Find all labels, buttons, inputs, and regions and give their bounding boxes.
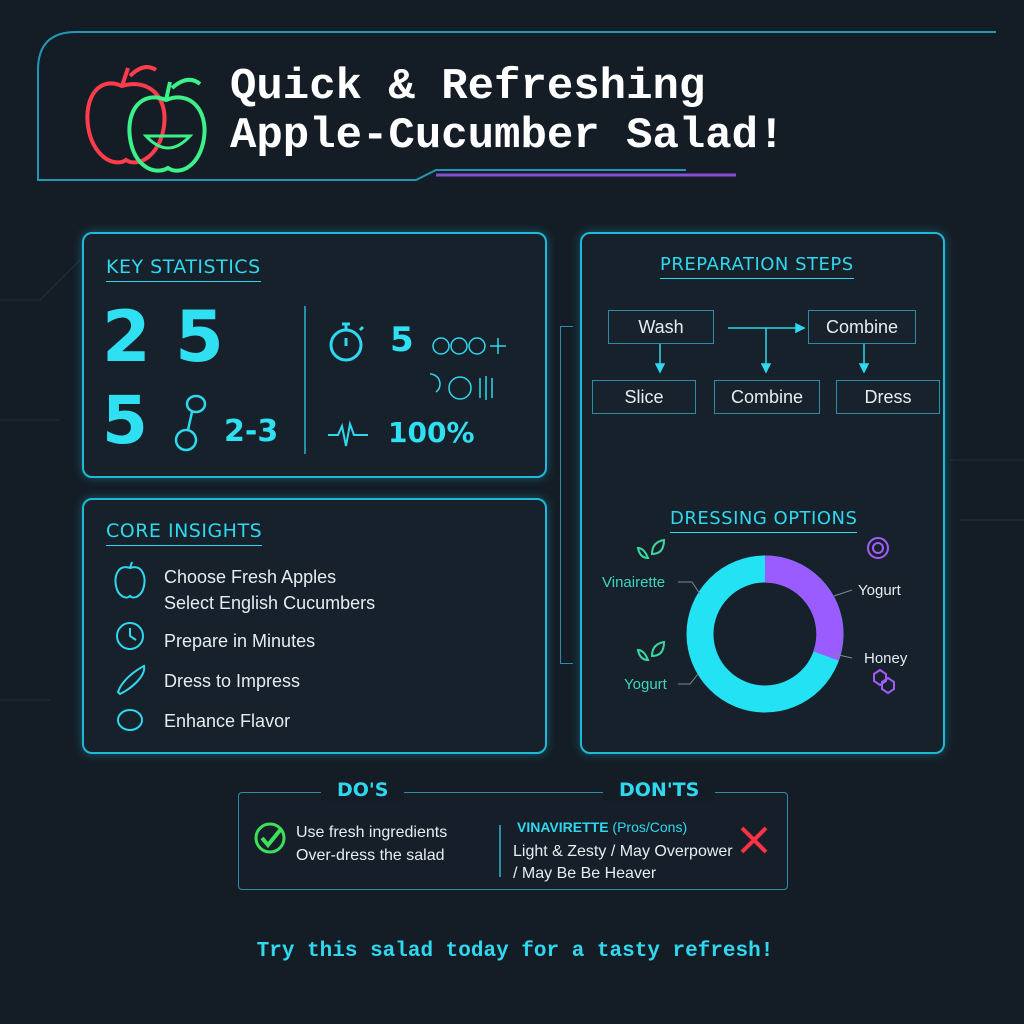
icon: stopwatch [330, 322, 364, 362]
insight texts: Select English Cucumbers [164, 593, 375, 613]
panel: preparation & dressing: Yogurt [624, 676, 667, 693]
footer call to action: Try this salad today for a tasty refresh! [257, 940, 773, 963]
connector bracket [560, 326, 573, 664]
panel: core insights [82, 498, 547, 754]
panel: do's and don'ts: / May Be Be Heaver [513, 865, 656, 882]
stat numbers: 2 5 [102, 296, 224, 378]
flowchart: Combine [826, 317, 898, 337]
flowchart: Combine [731, 387, 803, 407]
heading: don'ts: DON'TS [619, 779, 699, 801]
panel: key statistics: 2-3 [224, 414, 278, 449]
heading: CORE INSIGHTS [106, 520, 262, 542]
panel: core insights: Enhance Flavor [164, 711, 290, 731]
insight texts [164, 567, 375, 613]
icon: pulse [328, 420, 368, 446]
flowchart [592, 310, 940, 414]
title: Apple-Cucumber Salad! [230, 111, 784, 161]
panel: do's and don'ts: Light & Zesty / May Overpower [513, 843, 733, 860]
flowchart: Slice [624, 387, 664, 407]
heading: do's [321, 779, 404, 801]
panel: preparation & dressing [580, 232, 945, 754]
icon: honey dipper [174, 394, 206, 452]
panel: key statistics: 5 [102, 382, 148, 459]
panel: preparation & dressing: Yogurt [858, 582, 901, 599]
do's text: Over-dress the salad [296, 847, 445, 864]
icon: cross [740, 826, 768, 854]
icon: check [254, 822, 286, 854]
flowchart: Dress [864, 387, 912, 407]
icon: apples [85, 65, 207, 173]
flowchart: Wash [638, 317, 684, 337]
do's text [296, 824, 447, 864]
heading: do's: DO'S [337, 779, 388, 801]
title: Quick & Refreshing [230, 62, 705, 112]
panel: key statistics: 100% [388, 416, 475, 449]
header panel [37, 31, 996, 181]
panel: key statistics: 5 [390, 320, 414, 360]
icons [114, 562, 146, 731]
panel: key statistics [82, 232, 547, 478]
panel: do's and don'ts [238, 792, 788, 890]
title [230, 62, 784, 161]
heading: dressing options: DRESSING OPTIONS [670, 508, 857, 529]
panel: preparation & dressing: Honey [864, 650, 907, 667]
donut chart [636, 537, 895, 712]
heading: KEY STATISTICS [106, 256, 261, 278]
panel: core insights: Dress to Impress [164, 671, 300, 691]
don'ts text: VINAVIRETTE (Pros/Cons) [517, 819, 687, 835]
panel: core insights: Prepare in Minutes [164, 631, 315, 651]
do's text: Use fresh ingredients [296, 824, 447, 841]
heading: prep steps: PREPARATION STEPS [660, 254, 854, 275]
icons: small [430, 337, 506, 400]
donut labels: Vinairette [602, 574, 665, 591]
insight texts: Choose Fresh Apples [164, 567, 336, 587]
